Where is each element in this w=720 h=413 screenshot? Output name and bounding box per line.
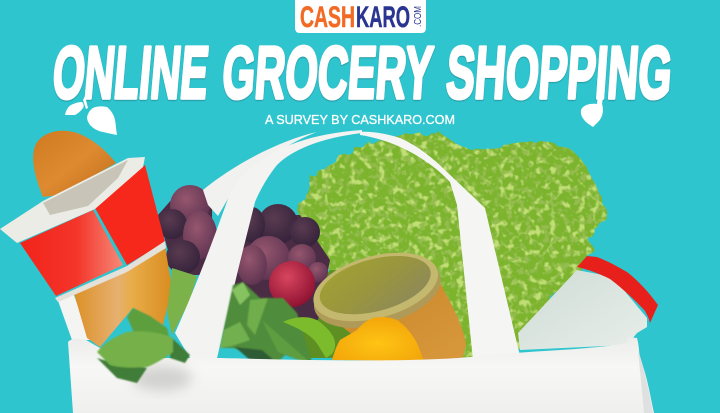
red wrapper right [95, 165, 165, 265]
pasta package [0, 157, 172, 347]
greens behind handle [167, 268, 197, 335]
bottle cap [577, 256, 658, 323]
bottle [518, 256, 658, 350]
pasta bundle [73, 246, 172, 347]
zigzag band [55, 241, 166, 302]
bag shadow under basil [132, 365, 192, 391]
basil leaves [97, 308, 190, 383]
title [50, 31, 675, 114]
green pepper [283, 317, 335, 358]
bag handle under pasta [57, 295, 90, 340]
logo: CashKaro: .COM [413, 6, 424, 27]
logo: CashKaro: KARO [356, 1, 410, 34]
icon: onion on title [581, 92, 604, 127]
bag handle: front right [360, 132, 520, 360]
logo: CashKaro [295, 0, 426, 34]
jar lid [305, 240, 448, 341]
title: ONLINE [50, 31, 212, 114]
yellow pepper [332, 317, 424, 361]
jar body [340, 280, 466, 360]
logo: CashKaro: CASH [300, 1, 355, 34]
bag handle: back [203, 132, 317, 216]
title: GROCERY [220, 31, 436, 114]
grapes [157, 185, 330, 320]
bag handle: front left [175, 130, 362, 358]
red wrapper left [20, 210, 123, 296]
icon: leaves on title [65, 96, 117, 135]
green leaves [220, 282, 313, 365]
bag body [68, 337, 654, 413]
subtitle: A SURVEY BY CASHKARO.COM [265, 112, 455, 127]
plastic wrap [0, 157, 145, 243]
bread [33, 131, 116, 197]
lettuce [296, 133, 607, 360]
